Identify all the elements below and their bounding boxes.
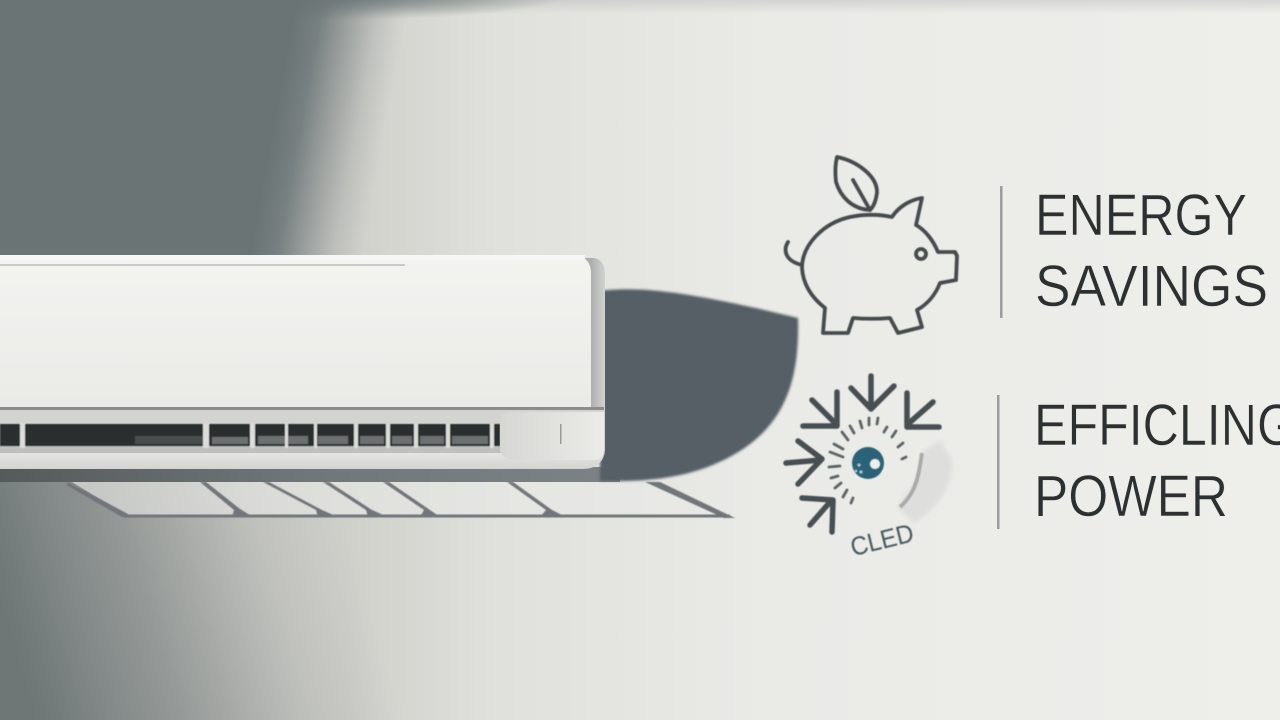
air conditioner indoor unit (0, 255, 605, 469)
air outlet (0, 423, 500, 448)
lower lip (0, 446, 604, 469)
radial ticks (829, 418, 906, 503)
heading: energy savings (1035, 183, 1268, 319)
divider: energy savings (1000, 186, 1002, 318)
eye (916, 249, 926, 259)
icon: efficient power snowflake dial (786, 376, 952, 562)
leaf (835, 157, 877, 210)
lower body seam (0, 407, 604, 410)
main body (0, 256, 591, 408)
garbled label: CLED (847, 517, 917, 562)
divider: efficient power (997, 395, 1000, 529)
inward arrows (786, 376, 939, 532)
band under the unit (0, 467, 620, 482)
heading: efficient power (1034, 393, 1280, 529)
tail (786, 242, 802, 265)
cast shadow of air conditioner (600, 289, 798, 481)
heading: efficient power: POWER (1034, 464, 1228, 529)
grey swoosh arrow (898, 440, 952, 523)
pig body (802, 198, 957, 333)
central eye (852, 447, 884, 479)
icon: piggy bank with leaf (786, 157, 957, 333)
top seam (0, 264, 405, 266)
heading: energy savings: ENERGY (1035, 183, 1247, 248)
louver light shadow on wall (66, 482, 735, 518)
corner panel (500, 412, 604, 460)
right end cap (560, 258, 605, 469)
